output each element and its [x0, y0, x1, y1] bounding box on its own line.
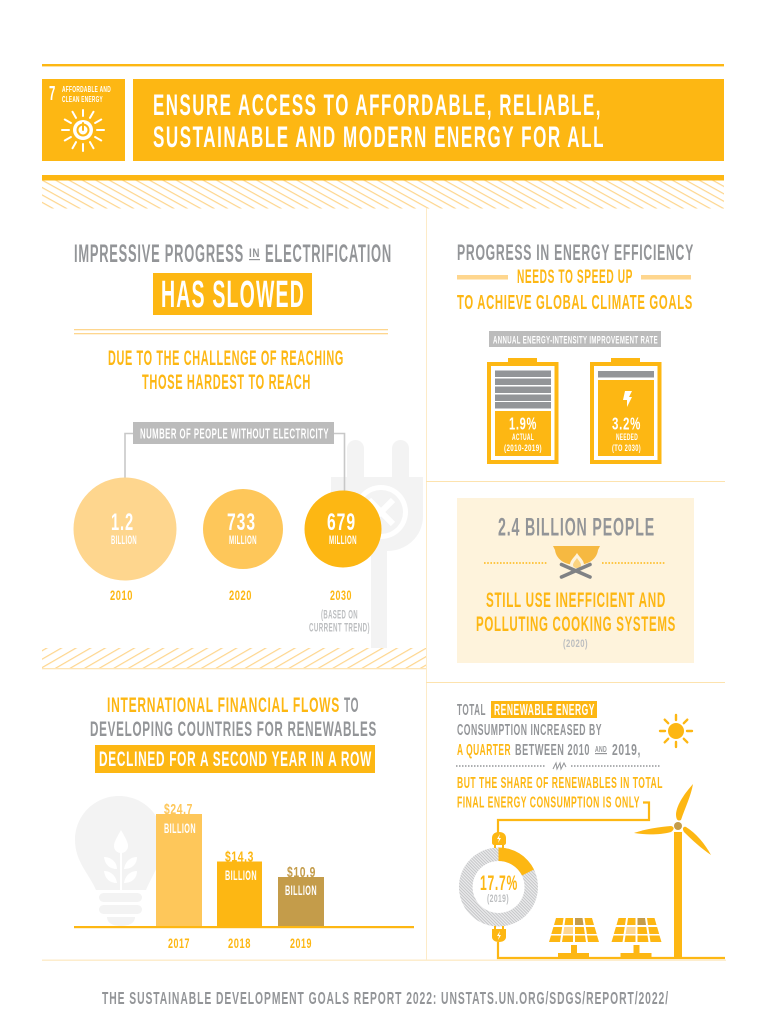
icon: bottom plug [492, 926, 506, 942]
heading: electrification has slowed: ELECTRIFICATION [265, 240, 392, 268]
subheading [108, 347, 344, 394]
bar: 2017 [156, 801, 202, 951]
panel: renewable energy [456, 701, 725, 958]
bar: 2018: 2018 [228, 935, 251, 951]
heading: financial flows: TO [344, 694, 359, 717]
battery: needed 3.2%: NEEDED [616, 432, 638, 443]
panel: electrification progress [74, 240, 423, 648]
title banner [133, 79, 724, 161]
bar: 2019: BILLION [285, 882, 317, 898]
text block: renewable energy consumption: 2019, [612, 742, 641, 759]
icon: solar panel two [612, 918, 662, 958]
subheading: THOSE HARDEST TO REACH [142, 371, 311, 394]
bar: 2017: 2017 [168, 935, 190, 951]
bar: 2018: $14.3 [225, 848, 254, 866]
battery: actual 1.9%: 1.9% [509, 414, 537, 434]
battery: needed 3.2% [592, 358, 660, 462]
battery: actual 1.9%: ACTUAL [512, 432, 534, 443]
bubble: 2030 [304, 490, 382, 634]
icon: lightning bolt [623, 391, 632, 407]
bubble: 2020: MILLION [229, 535, 257, 547]
icon: light bulb background [75, 796, 163, 926]
text block: renewable energy consumption [456, 701, 663, 812]
bubble: 2020: 2020 [229, 587, 252, 603]
text block: renewable energy consumption: TOTAL [457, 702, 486, 719]
donut chart: 17.7%: 17.7% [480, 872, 518, 895]
bubble: 2010: 1.2 [111, 509, 134, 536]
bar: 2018 [217, 848, 262, 951]
bubble: 2020 [203, 489, 283, 603]
text block: renewable energy consumption: A QUARTER [457, 742, 511, 759]
icon: solar panel one [549, 918, 599, 958]
battery: needed 3.2%: 3.2% [612, 414, 641, 434]
SDG 7 badge: AFFORDABLE AND [62, 84, 111, 94]
icon: cooking pot over fire [553, 546, 600, 577]
heading: financial flows: INTERNATIONAL FINANCIAL FLOWS [107, 694, 340, 717]
bubble: 2030: 2030 [330, 587, 352, 603]
text block: renewable energy consumption: AND [595, 744, 607, 754]
heading: financial flows: DEVELOPING COUNTRIES FOR RENEWABLES [90, 718, 377, 741]
SDG 7 badge: CLEAN ENERGY [62, 94, 103, 104]
heading: financial flows [90, 694, 377, 773]
donut chart: 17.7%: (2019) [487, 893, 509, 905]
panel: international financial flows [74, 694, 414, 951]
label: number of people without electricity [133, 422, 334, 444]
battery: needed 3.2%: (TO 2030) [612, 443, 641, 454]
bar: 2017: BILLION [164, 820, 196, 836]
bubble: 2030: 679 [327, 509, 356, 536]
connector lines [125, 434, 344, 492]
bar: 2017: $24.7 [164, 801, 193, 818]
icon: wind turbine [634, 784, 711, 958]
icon: sun [660, 715, 692, 747]
bubble: 2030: CURRENT TREND) [309, 622, 370, 634]
bubble: 2030: (BASED ON [321, 610, 358, 622]
heading: electrification has slowed: IMPRESSIVE PROGRESS [74, 240, 244, 268]
connector circuit line [498, 802, 725, 958]
text block: renewable energy consumption: BETWEEN 2010 [515, 742, 590, 759]
bar: 2019 [278, 864, 324, 951]
icon: sun with power symbol [62, 110, 104, 151]
donut chart: 17.7% [459, 847, 538, 926]
heading: electrification has slowed [74, 240, 392, 316]
icon: plug background [331, 440, 423, 648]
bar: 2019: 2019 [290, 935, 312, 951]
battery: actual 1.9% [489, 358, 556, 462]
bubble: 2030: MILLION [329, 535, 357, 547]
bar chart: financial flows [74, 801, 414, 951]
bubble: 2010: BILLION [111, 535, 137, 547]
SDG 7 badge: 7 [49, 83, 56, 105]
text block: renewable energy consumption: RENEWABLE ENERGY [494, 702, 595, 719]
label: annual energy-intensity improvement rate [489, 331, 661, 347]
SDG 7 badge [42, 79, 125, 161]
text block: renewable energy consumption: CONSUMPTION INCREASED BY [457, 722, 602, 739]
bubble: 2010: 2010 [110, 587, 133, 603]
panel: cooking systems: (2020) [563, 638, 588, 650]
heading: energy efficiency [457, 240, 694, 314]
heading: financial flows: DECLINED FOR A SECOND YEAR IN A ROW [99, 748, 372, 771]
subheading: DUE TO THE CHALLENGE OF REACHING [108, 347, 344, 370]
panel: cooking systems [457, 498, 694, 663]
battery: actual 1.9%: (2010-2019) [504, 443, 542, 454]
label: number of people without electricity: NUMBER OF PEOPLE WITHOUT ELECTRICITY [140, 426, 329, 442]
icon: top plug [492, 832, 506, 848]
heading: electrification has slowed: HAS SLOWED [161, 274, 305, 316]
heading: energy efficiency: NEEDS TO SPEED UP [517, 266, 633, 288]
heading: electrification has slowed: IN [249, 246, 260, 260]
panel: energy efficiency [457, 240, 694, 462]
panel: cooking systems: 2.4 BILLION PEOPLE [498, 514, 655, 542]
bubble: 2010 [74, 478, 176, 603]
bar: 2019: $10.9 [287, 864, 316, 881]
bubble: 2020: 733 [227, 509, 256, 536]
bar: 2018: BILLION [225, 867, 257, 883]
header [42, 64, 724, 161]
